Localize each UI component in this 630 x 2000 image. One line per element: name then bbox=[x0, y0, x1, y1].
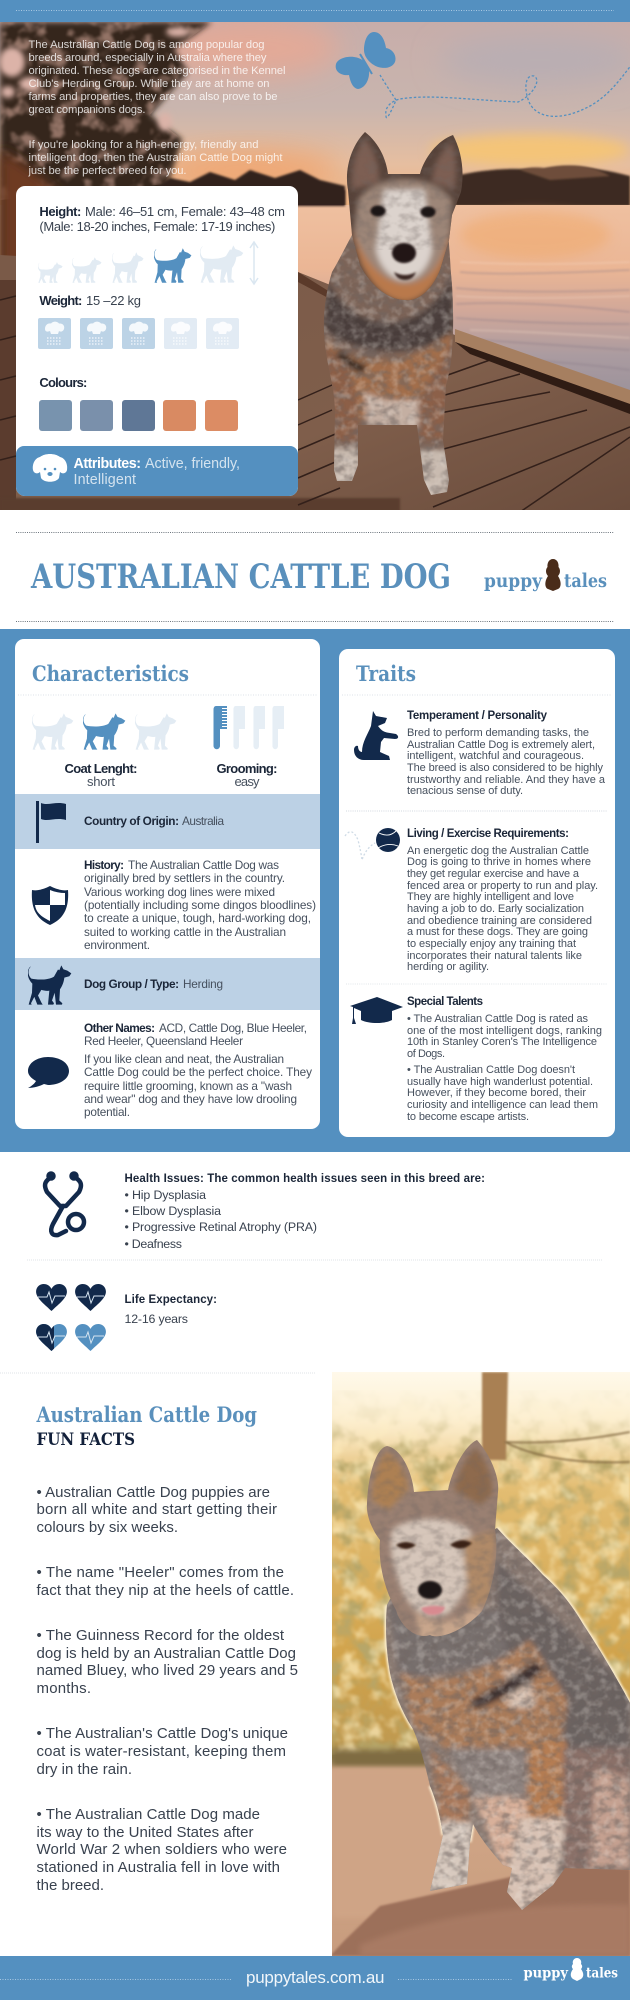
life expectancy block: Life Expectancy: bbox=[124, 1294, 217, 1306]
living block: They are highly intelligent and love bbox=[407, 891, 574, 903]
history block: Various working dog lines were mixed bbox=[84, 885, 275, 899]
icon: height scale dogs bbox=[38, 242, 258, 284]
weight text: 15 –22 kg bbox=[86, 293, 141, 308]
temperament block: intelligent, watchful and courageous. bbox=[407, 750, 584, 762]
other names block: and wear" dog and they have low drooling bbox=[84, 1092, 297, 1106]
footer logo: puppy bbox=[524, 1966, 569, 1982]
intro text: originated. These dogs are categorised in the Kennel bbox=[28, 65, 286, 77]
band: dog group: Dog Group / Type: bbox=[84, 977, 179, 991]
footer bbox=[0, 1956, 630, 2000]
footer url: puppytales.com.au bbox=[246, 1968, 384, 1987]
fun facts text: dog is held by an Australian Cattle Dog bbox=[36, 1645, 296, 1662]
footer logo: tales bbox=[586, 1966, 618, 1982]
attributes banner: Intelligent bbox=[74, 472, 136, 488]
dog body outline glow bbox=[386, 1528, 630, 1842]
icon: speech bubble bbox=[28, 1057, 69, 1088]
living block: a must for these dogs. They are going bbox=[407, 926, 588, 938]
blue section background bbox=[0, 629, 630, 1152]
icon: hearts bbox=[36, 1284, 106, 1351]
temperament block: Temperament / Personality bbox=[407, 710, 548, 722]
health issues block: • Hip Dysplasia bbox=[124, 1188, 206, 1202]
title: AUSTRALIAN CATTLE DOG bbox=[30, 557, 451, 597]
jetty beam bbox=[298, 272, 328, 297]
icon: dog face bbox=[33, 454, 67, 482]
dog body bbox=[380, 1520, 630, 1920]
health issues block: • Progressive Retinal Atrophy (PRA) bbox=[124, 1220, 317, 1234]
health issues block: • Elbow Dysplasia bbox=[124, 1204, 221, 1218]
history block bbox=[32, 858, 316, 952]
special talents block: of Dogs. bbox=[407, 1048, 445, 1060]
intro text: great companions dogs. bbox=[28, 104, 146, 116]
golden foliage bbox=[332, 1390, 630, 1755]
fun facts text: stationed in Australia fell in love with bbox=[36, 1859, 280, 1876]
history block: environment. bbox=[84, 938, 150, 952]
fun facts text: • The Guinness Record for the oldest bbox=[36, 1627, 285, 1644]
band: country of origin: Country of Origin: bbox=[84, 814, 179, 828]
living block bbox=[345, 828, 598, 973]
logo: puppy tales: puppy bbox=[484, 570, 543, 592]
special talents block: one of the most intelligent dogs, ranking bbox=[407, 1025, 602, 1037]
attributes banner bbox=[16, 446, 298, 496]
icon: dog bbox=[28, 965, 71, 1005]
special talents block: However, if they become bored, their bbox=[407, 1087, 586, 1099]
icon: coat length dogs bbox=[32, 713, 176, 750]
history block: (potentially including some dingos bloodlines) bbox=[84, 898, 316, 912]
history block: to create a unique, tough, hard-working dog, bbox=[84, 911, 311, 925]
temperament block: Australian Cattle Dog is extremely alert, bbox=[407, 739, 595, 751]
icon: weight scale bbox=[38, 318, 239, 349]
history block: The Australian Cattle Dog was bbox=[128, 858, 279, 872]
fun facts heading: FUN FACTS bbox=[36, 1430, 135, 1450]
dog head bbox=[366, 1440, 498, 1636]
ground bbox=[332, 1750, 442, 1767]
living block: herding or agility. bbox=[407, 961, 489, 973]
other names block: ACD, Cattle Dog, Blue Heeler, bbox=[159, 1021, 307, 1035]
icon: ball with trail bbox=[345, 828, 400, 860]
fun facts text: fact that they nip at the heels of cattle. bbox=[36, 1582, 294, 1599]
intro text: just be the perfect breed for you. bbox=[28, 165, 186, 177]
fun facts heading bbox=[36, 1402, 257, 1450]
coat length label: Coat Lenght: bbox=[64, 761, 138, 776]
fun facts heading: Australian Cattle Dog bbox=[36, 1402, 257, 1427]
intro text: breeds around, especially in Australia where they bbox=[28, 52, 267, 64]
dog face features bbox=[370, 206, 436, 280]
living block: incorporates their natural talents like bbox=[407, 950, 582, 962]
height text: Male: 46–51 cm, Female: 43–48 cm bbox=[85, 204, 285, 219]
height text: Height: bbox=[39, 204, 81, 219]
colours label: Colours: bbox=[39, 375, 87, 390]
special talents block: curiosity and intelligence can lead them bbox=[407, 1099, 598, 1111]
health issues block bbox=[45, 1173, 485, 1251]
band: country of origin: Australia bbox=[182, 814, 224, 828]
band: dog group: Herding bbox=[183, 977, 223, 991]
living block: Dog is going to thrive in homes where bbox=[407, 856, 591, 868]
rock bbox=[330, 1865, 630, 1956]
other names block: Red Heeler, Queensland Heeler bbox=[84, 1034, 243, 1048]
logo: puppy tales: tales bbox=[564, 570, 607, 592]
footer logo bbox=[524, 1958, 618, 1982]
icon: flag bbox=[36, 801, 66, 843]
fun facts text: • The Australian Cattle Dog made bbox=[36, 1806, 260, 1823]
attributes banner: Active, friendly, bbox=[145, 456, 240, 472]
health issues block: Health Issues: The common health issues seen in this breed are: bbox=[124, 1173, 485, 1185]
colour swatches bbox=[39, 400, 238, 431]
intro text: The Australian Cattle Dog is among popular dog bbox=[28, 39, 264, 51]
fun facts text: colours by six weeks. bbox=[36, 1519, 178, 1536]
icon: grooming combs bbox=[214, 706, 284, 749]
temperament block: tenacious sense of duty. bbox=[407, 785, 523, 797]
coat length label: short bbox=[87, 774, 115, 789]
health issues block: • Deafness bbox=[124, 1237, 182, 1251]
living block: fenced area or property to run and play. bbox=[407, 880, 598, 892]
other names block: Cattle Dog could be the perfect choice. They bbox=[84, 1065, 312, 1079]
dog head bbox=[346, 132, 462, 300]
other names block: If you like clean and neat, the Australian bbox=[84, 1052, 284, 1066]
other names block: Other Names: bbox=[84, 1021, 155, 1035]
fun facts text bbox=[36, 1484, 298, 1894]
temperament block: The breed is also considered to be highly bbox=[407, 762, 604, 774]
photo: dog on rock bbox=[330, 1372, 630, 1956]
weight text: Weight: bbox=[39, 293, 82, 308]
grooming label: Grooming: bbox=[216, 761, 278, 776]
icon: butterfly with dashed trail bbox=[336, 32, 630, 118]
temperament block: trustworthy and reliable. And they have a bbox=[407, 774, 606, 786]
temperament block bbox=[354, 710, 606, 797]
heading: characteristics: Characteristics bbox=[32, 661, 189, 686]
attributes banner: Attributes: bbox=[74, 456, 141, 472]
intro text: intelligent dog, then the Australian Cattle Dog might bbox=[28, 152, 283, 164]
top blue bar bbox=[0, 0, 630, 22]
dog face features bbox=[396, 1540, 472, 1615]
fun facts text: months. bbox=[36, 1680, 91, 1697]
fun facts text: born all white and start getting their bbox=[36, 1501, 277, 1518]
living block: An energetic dog the Australian Cattle bbox=[407, 845, 589, 857]
other names block bbox=[28, 1021, 312, 1119]
title block bbox=[16, 532, 614, 622]
life expectancy block: 12-16 years bbox=[124, 1312, 188, 1326]
living block: having a job to do. Early socialization bbox=[407, 903, 584, 915]
panel: characteristics bbox=[15, 639, 320, 1129]
distant treeline bbox=[150, 170, 345, 206]
height text: (Male: 18-20 inches, Female: 17-19 inches) bbox=[39, 219, 275, 234]
dog body bbox=[320, 235, 460, 500]
icon: sitting dog bbox=[354, 711, 398, 760]
special talents block: • The Australian Cattle Dog is rated as bbox=[407, 1013, 588, 1025]
special talents block: to become escape artists. bbox=[407, 1111, 529, 1123]
living block: they get regular exercise and have a bbox=[407, 868, 580, 880]
band: country of origin bbox=[15, 794, 320, 849]
icon: graduation cap bbox=[350, 997, 403, 1024]
tree silhouette bbox=[0, 22, 212, 270]
hero photo: dog on jetty at sunset bbox=[0, 18, 630, 512]
other names block: require little grooming, known as a "wash bbox=[84, 1079, 292, 1093]
fun facts text: • Australian Cattle Dog puppies are bbox=[36, 1484, 270, 1501]
special talents block: 10th in Stanley Coren's The Intelligence bbox=[407, 1036, 597, 1048]
other names block: potential. bbox=[84, 1105, 130, 1119]
water bbox=[0, 205, 630, 390]
jetty deck bbox=[0, 255, 630, 510]
intro text bbox=[28, 39, 286, 177]
intro text: If you're looking for a high-energy, friendly and bbox=[28, 139, 258, 151]
icon: stethoscope bbox=[45, 1174, 84, 1235]
height text bbox=[39, 204, 285, 234]
panel: traits bbox=[339, 649, 615, 1137]
logo: puppy tales bbox=[484, 559, 607, 592]
life expectancy block bbox=[36, 1284, 217, 1351]
fun facts text: named Bluey, who lived 29 years and 5 bbox=[36, 1662, 298, 1679]
fun facts text: the breed. bbox=[36, 1877, 104, 1894]
icon: shield bbox=[32, 886, 68, 925]
coat length label bbox=[64, 761, 138, 789]
special talents block: • The Australian Cattle Dog doesn't bbox=[407, 1064, 575, 1076]
grooming label bbox=[216, 761, 278, 789]
living block: to especially enjoy any training that bbox=[407, 938, 576, 950]
fun facts text: • The Australian's Cattle Dog's unique bbox=[36, 1725, 288, 1742]
fun facts text: World War 2 when soldiers who were bbox=[36, 1841, 287, 1858]
history block: originally bred by settlers in the country. bbox=[84, 871, 285, 885]
fun facts text: its way to the United States after bbox=[36, 1824, 254, 1841]
special talents block: Special Talents bbox=[407, 996, 483, 1008]
temperament block: Bred to perform demanding tasks, the bbox=[407, 727, 589, 739]
fun facts text: dry in the rain. bbox=[36, 1761, 132, 1778]
living block: and obedience training are considered bbox=[407, 915, 592, 927]
far hills bbox=[298, 166, 630, 205]
intro text: Club's Herding Group. While they are at home on bbox=[28, 78, 270, 90]
living block: Living / Exercise Requirements: bbox=[407, 828, 569, 840]
panel: breed stats card bbox=[16, 186, 298, 496]
special talents block: usually have high wanderlust potential. bbox=[407, 1076, 593, 1088]
history block: suited to working cattle in the Australian bbox=[84, 925, 286, 939]
heading: traits: Traits bbox=[356, 661, 416, 686]
fun facts text: • The name "Heeler" comes from the bbox=[36, 1564, 284, 1581]
tree trunk bbox=[482, 1372, 508, 1460]
history block: History: bbox=[84, 858, 124, 872]
fun facts text: coat is water-resistant, keeping them bbox=[36, 1743, 286, 1760]
special talents block bbox=[350, 996, 602, 1123]
grooming label: easy bbox=[234, 774, 260, 789]
band: dog group bbox=[15, 958, 320, 1010]
intro text: farms and properties, they are can also prove to be bbox=[28, 91, 278, 103]
